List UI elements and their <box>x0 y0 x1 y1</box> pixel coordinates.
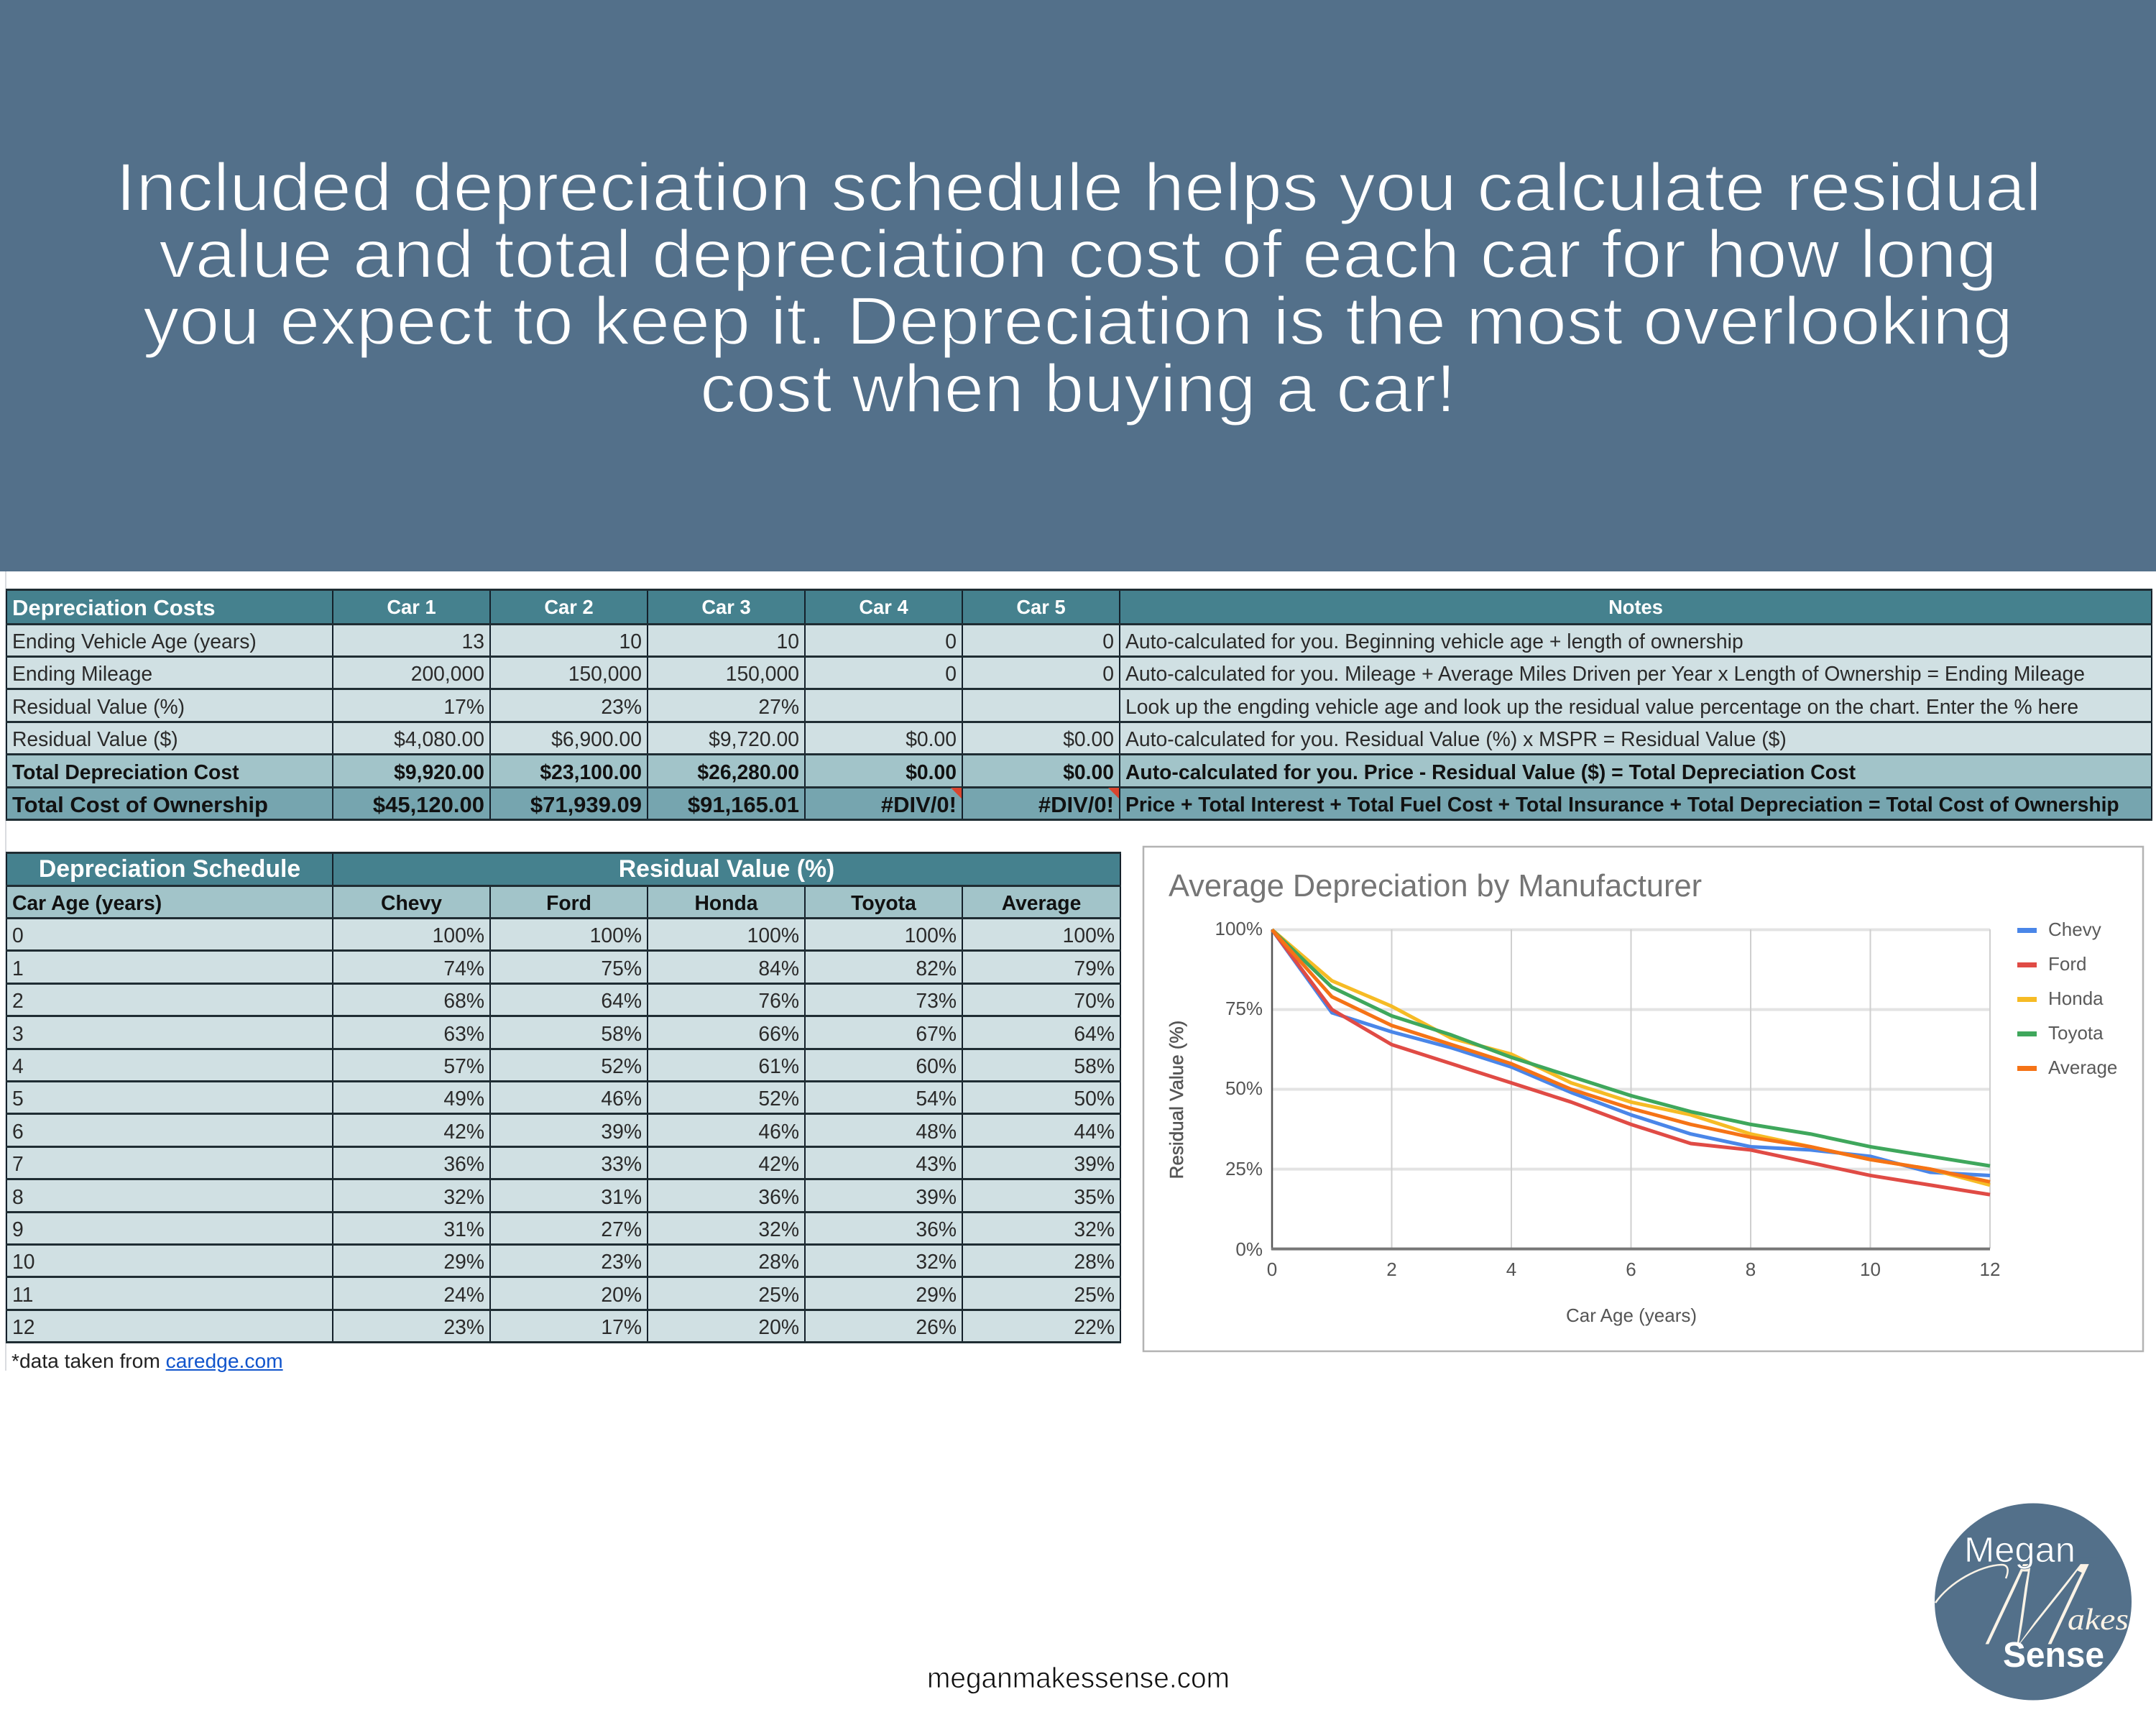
row: total cost of ownership <box>7 788 2151 819</box>
age 3: 67% <box>916 1022 957 1045</box>
headline text: cost when buying a car! <box>700 351 1456 427</box>
row: total depreciation cost: $9,920.00 <box>394 760 484 783</box>
row: ending vehicle age: 10 <box>777 630 799 653</box>
row: residual value percent: 27% <box>758 695 799 718</box>
age 6: 39% <box>601 1120 642 1143</box>
y axis labels: 0% <box>1235 1238 1263 1260</box>
schedule title row: Residual Value (%) <box>619 855 834 883</box>
age 1: 1 <box>12 957 24 980</box>
row: ending mileage: 0 <box>1102 662 1114 685</box>
age 9: 27% <box>601 1218 642 1241</box>
age 7: 33% <box>601 1152 642 1175</box>
chart legend: Average <box>2048 1057 2117 1078</box>
age 0: 100% <box>905 924 957 947</box>
row: ending mileage: Ending Mileage <box>12 662 152 685</box>
age 0: 100% <box>433 924 484 947</box>
row: total depreciation cost: Total Depreciation Cost <box>12 760 239 783</box>
age 2: 64% <box>601 989 642 1012</box>
age 2: 76% <box>758 989 799 1012</box>
age 4: 60% <box>916 1054 957 1077</box>
age 11: 11 <box>12 1283 33 1306</box>
age 7: 36% <box>443 1152 484 1175</box>
schedule column headers: Average <box>1002 891 1081 914</box>
chart legend: Honda <box>2048 988 2104 1009</box>
y axis title: Residual Value (%) <box>1166 1021 1187 1179</box>
age 8: 8 <box>12 1185 24 1208</box>
row: ending vehicle age: 10 <box>619 630 642 653</box>
chart title: Average Depreciation by Manufacturer <box>1169 869 1702 903</box>
age 4: 4 <box>12 1054 24 1077</box>
age 8: 36% <box>758 1185 799 1208</box>
row: total cost of ownership: Total Cost of Ownership <box>12 792 268 817</box>
age 2: 2 <box>12 989 24 1012</box>
table header row: Car 1 <box>387 596 436 618</box>
age 4: 61% <box>758 1054 799 1077</box>
age 2: 73% <box>916 989 957 1012</box>
table header row <box>7 591 2151 819</box>
chart legend: Toyota <box>2048 1022 2104 1044</box>
age 2: 70% <box>1074 989 1115 1012</box>
age 1: 74% <box>443 957 484 980</box>
chart legend: Chevy <box>2048 919 2101 940</box>
age 12: 12 <box>12 1315 34 1338</box>
age 6: 46% <box>758 1120 799 1143</box>
row: total depreciation cost: $26,280.00 <box>697 760 799 783</box>
row: total cost of ownership: $71,939.09 <box>530 792 642 817</box>
row: residual value percent: Residual Value (%) <box>12 695 185 718</box>
row: residual value percent <box>7 690 2151 721</box>
age 6: 48% <box>916 1120 957 1143</box>
age 3: 63% <box>443 1022 484 1045</box>
age 8: 35% <box>1074 1185 1115 1208</box>
table header row: Notes <box>1608 596 1663 618</box>
x axis labels: 2 <box>1386 1259 1397 1280</box>
row: total cost of ownership: #DIV/0! <box>881 792 957 817</box>
chart legend: Ford <box>2048 953 2086 975</box>
row: ending mileage: 150,000 <box>568 662 642 685</box>
table header row: Depreciation Costs <box>12 595 216 620</box>
row: residual value dollars: $9,720.00 <box>709 727 799 750</box>
age 10: 10 <box>12 1250 34 1273</box>
schedule title row: Depreciation Schedule <box>39 855 300 883</box>
age 4: 57% <box>443 1054 484 1077</box>
row: ending mileage: 150,000 <box>726 662 799 685</box>
logo: Megan Makes Sense: Sense <box>2003 1636 2104 1675</box>
age 0 <box>7 919 1120 949</box>
x axis labels: 0 <box>1267 1259 1277 1280</box>
x axis labels: 12 <box>1980 1259 2000 1280</box>
chart legend <box>2017 919 2117 1078</box>
age 10: 28% <box>758 1250 799 1273</box>
age 10: 29% <box>443 1250 484 1273</box>
age 11: 24% <box>443 1283 484 1306</box>
age 5: 54% <box>916 1087 957 1110</box>
row: total depreciation cost: $0.00 <box>906 760 957 783</box>
row: residual value dollars: Residual Value ($) <box>12 727 178 750</box>
schedule column headers: Chevy <box>381 891 442 914</box>
headline text: you expect to keep it. Depreciation is the most overlooking <box>143 283 2013 359</box>
age 0: 0 <box>12 924 24 947</box>
x axis labels: 10 <box>1860 1259 1881 1280</box>
age 11: 25% <box>1074 1283 1115 1306</box>
age 12: 23% <box>443 1315 484 1338</box>
age 11: 25% <box>758 1283 799 1306</box>
row: ending vehicle age: 0 <box>1102 630 1114 653</box>
age 6: 6 <box>12 1120 24 1143</box>
x axis title: Car Age (years) <box>1566 1305 1697 1326</box>
age 3: 66% <box>758 1022 799 1045</box>
schedule column headers <box>7 887 1120 917</box>
headline text: Included depreciation schedule helps you calculate residual <box>116 150 2042 226</box>
logo: Megan Makes Sense: M <box>1969 1535 2101 1675</box>
error marker: car 4 <box>951 788 962 799</box>
age 5 <box>7 1082 1120 1113</box>
row: ending mileage: 0 <box>945 662 957 685</box>
row: residual value dollars: $0.00 <box>1063 727 1114 750</box>
age 8: 39% <box>916 1185 957 1208</box>
age 1 <box>7 952 1120 983</box>
table header row: Car 4 <box>859 596 908 618</box>
row: ending vehicle age: Auto-calculated for you. Beginning vehicle age + length of ownership <box>1125 630 1743 653</box>
age 2 <box>7 985 1120 1015</box>
age 1: 82% <box>916 957 957 980</box>
data lines <box>1272 930 1990 1195</box>
row: total cost of ownership: $91,165.01 <box>688 792 799 817</box>
x axis labels: 4 <box>1506 1259 1516 1280</box>
row: residual value dollars: $4,080.00 <box>394 727 484 750</box>
x axis labels <box>1267 1259 2000 1280</box>
logo: Megan Makes Sense: Megan <box>1964 1531 2076 1570</box>
y axis labels: 75% <box>1225 998 1263 1019</box>
row: residual value dollars: Auto-calculated for you. Residual Value (%) x MSPR = Residual Value ($) <box>1125 727 1787 750</box>
row: ending mileage: Auto-calculated for you. Mileage + Average Miles Driven per Year x Length of Ownership = Ending Mileage <box>1125 662 2085 685</box>
row: total depreciation cost: Auto-calculated for you. Price - Residual Value ($) = Total Depreciation Cost <box>1125 760 1856 783</box>
age 3: 3 <box>12 1022 24 1045</box>
age 12: 20% <box>758 1315 799 1338</box>
footnote: data source: *data taken from caredge.com <box>11 1349 283 1372</box>
logo: Megan Makes Sense: akes <box>2068 1604 2129 1637</box>
spreadsheet gutter <box>5 571 6 1371</box>
age 7: 39% <box>1074 1152 1115 1175</box>
age 7: 43% <box>916 1152 957 1175</box>
schedule title row <box>7 854 1120 1341</box>
age 2: 68% <box>443 989 484 1012</box>
age 6: 42% <box>443 1120 484 1143</box>
age 12: 22% <box>1074 1315 1115 1338</box>
age 5: 46% <box>601 1087 642 1110</box>
age 5: 49% <box>443 1087 484 1110</box>
age 6 <box>7 1115 1120 1146</box>
x axis labels: 8 <box>1746 1259 1756 1280</box>
age 8: 31% <box>601 1185 642 1208</box>
age 11 <box>7 1278 1120 1309</box>
row: residual value percent: 23% <box>601 695 642 718</box>
schedule column headers: Car Age (years) <box>12 891 162 914</box>
age 11: 20% <box>601 1283 642 1306</box>
age 4: 58% <box>1074 1054 1115 1077</box>
age 10: 32% <box>916 1250 957 1273</box>
age 9: 32% <box>1074 1218 1115 1241</box>
header band <box>0 0 2156 571</box>
footer website: meganmakessense.com <box>927 1662 1230 1694</box>
row: residual value percent: Look up the engding vehicle age and look up the residual value percentage on the chart. Enter the % here <box>1125 695 2078 718</box>
row: ending vehicle age: 0 <box>945 630 957 653</box>
table header row: Car 5 <box>1016 596 1066 618</box>
row: ending mileage: 200,000 <box>411 662 484 685</box>
row: total depreciation cost: $0.00 <box>1063 760 1114 783</box>
age 7: 7 <box>12 1152 24 1175</box>
y axis labels: 50% <box>1225 1077 1263 1099</box>
age 5: 50% <box>1074 1087 1115 1110</box>
row: ending vehicle age: Ending Vehicle Age (years) <box>12 630 257 653</box>
row: total depreciation cost: $23,100.00 <box>540 760 642 783</box>
row: residual value dollars <box>7 723 2151 753</box>
table header row: Car 3 <box>701 596 751 618</box>
age 12: 26% <box>916 1315 957 1338</box>
age 4 <box>7 1050 1120 1080</box>
age 12: 17% <box>601 1315 642 1338</box>
table: depreciation costs <box>6 589 2152 821</box>
y axis labels <box>1215 918 1263 1260</box>
age 5: 5 <box>12 1087 24 1110</box>
table: depreciation schedule <box>6 852 1121 1343</box>
age 11: 29% <box>916 1283 957 1306</box>
row: residual value dollars: $6,900.00 <box>551 727 642 750</box>
age 5: 52% <box>758 1087 799 1110</box>
age 6: 44% <box>1074 1120 1115 1143</box>
age 7 <box>7 1148 1120 1178</box>
schedule column headers: Honda <box>694 891 758 914</box>
age 8 <box>7 1180 1120 1211</box>
age 10: 28% <box>1074 1250 1115 1273</box>
schedule column headers: Ford <box>546 891 591 914</box>
row: ending mileage <box>7 658 2151 688</box>
age 7: 42% <box>758 1152 799 1175</box>
age 9: 36% <box>916 1218 957 1241</box>
age 3: 64% <box>1074 1022 1115 1045</box>
row: ending vehicle age <box>7 625 2151 656</box>
headline text <box>116 150 2042 427</box>
row: total cost of ownership: #DIV/0! <box>1038 792 1114 817</box>
age 0: 100% <box>590 924 642 947</box>
age 10: 23% <box>601 1250 642 1273</box>
age 9: 32% <box>758 1218 799 1241</box>
age 9 <box>7 1213 1120 1243</box>
row: residual value percent: 17% <box>443 695 484 718</box>
schedule column headers: Toyota <box>851 891 916 914</box>
age 9: 9 <box>12 1218 24 1241</box>
y axis labels: 25% <box>1225 1158 1263 1179</box>
row: total depreciation cost <box>7 755 2151 786</box>
row: residual value dollars: $0.00 <box>906 727 957 750</box>
error marker: car 5 <box>1108 788 1119 799</box>
y axis labels: 100% <box>1215 918 1263 939</box>
age 1: 79% <box>1074 957 1115 980</box>
age 8: 32% <box>443 1185 484 1208</box>
age 0: 100% <box>747 924 799 947</box>
age 1: 75% <box>601 957 642 980</box>
table header row: Car 2 <box>544 596 594 618</box>
age 1: 84% <box>758 957 799 980</box>
age 12 <box>7 1311 1120 1341</box>
age 3 <box>7 1017 1120 1048</box>
x axis labels: 6 <box>1626 1259 1636 1280</box>
row: total cost of ownership: Price + Total Interest + Total Fuel Cost + Total Insurance + Total Depreciation = Total Cost of Ownership <box>1125 793 2119 816</box>
age 9: 31% <box>443 1218 484 1241</box>
row: total cost of ownership: $45,120.00 <box>373 792 484 817</box>
age 10 <box>7 1246 1120 1276</box>
age 4: 52% <box>601 1054 642 1077</box>
row: ending vehicle age: 13 <box>462 630 484 653</box>
headline text: value and total depreciation cost of each car for how long <box>159 216 1997 293</box>
age 3: 58% <box>601 1022 642 1045</box>
age 0: 100% <box>1063 924 1115 947</box>
